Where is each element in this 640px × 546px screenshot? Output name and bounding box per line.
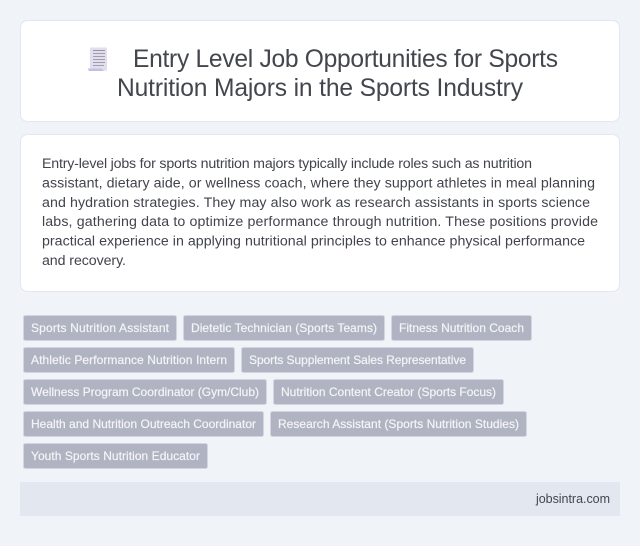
tag	[184, 316, 384, 340]
tag	[24, 412, 264, 436]
tag	[24, 316, 176, 340]
panel: title card	[20, 20, 620, 122]
tags	[24, 316, 532, 468]
text block: description: and recovery.	[42, 253, 126, 269]
tag	[270, 412, 526, 436]
tag: Research Assistant (Sports Nutrition Studies)	[278, 417, 519, 431]
tag: Nutrition Content Creator (Sports Focus)	[281, 385, 496, 399]
tag	[242, 348, 474, 372]
tag: Health and Nutrition Outreach Coordinator	[31, 417, 256, 431]
tag	[24, 444, 208, 468]
tag: Sports Supplement Sales Representative	[249, 353, 466, 367]
text block: description	[42, 156, 598, 269]
text block: description: Entry-level jobs for sports nutrition majors typically include roles such as nutrition	[42, 156, 532, 172]
tag	[24, 380, 266, 404]
tag: Sports Nutrition Assistant	[31, 321, 170, 335]
title: Entry Level Job Opportunities for Sports	[133, 46, 558, 73]
text block: description: assistant, dietary aide, or wellness coach, where they support athletes in meal planning	[42, 175, 595, 191]
text block: description: and hydration strategies. They may also work as research assistants in sports science	[42, 195, 590, 211]
tag	[274, 380, 504, 404]
tag: Athletic Performance Nutrition Intern	[31, 353, 227, 367]
footer	[20, 482, 620, 516]
footer text: jobsintra.com	[535, 492, 610, 506]
panel: description	[20, 134, 620, 292]
tag	[24, 348, 234, 372]
tag	[392, 316, 532, 340]
title: Nutrition Majors in the Sports Industry	[117, 75, 524, 102]
tag: Dietetic Technician (Sports Teams)	[191, 321, 377, 335]
tag: Wellness Program Coordinator (Gym/Club)	[31, 385, 259, 399]
icon: document scroll	[88, 48, 107, 71]
text block: description: labs, gathering data to optimize performance through nutrition. These positions provide	[42, 214, 598, 230]
text block: description: practical experience in applying nutritional principles to enhance physical performance	[42, 234, 585, 250]
tag: Fitness Nutrition Coach	[399, 321, 524, 335]
tag: Youth Sports Nutrition Educator	[31, 449, 200, 463]
title	[117, 46, 558, 102]
